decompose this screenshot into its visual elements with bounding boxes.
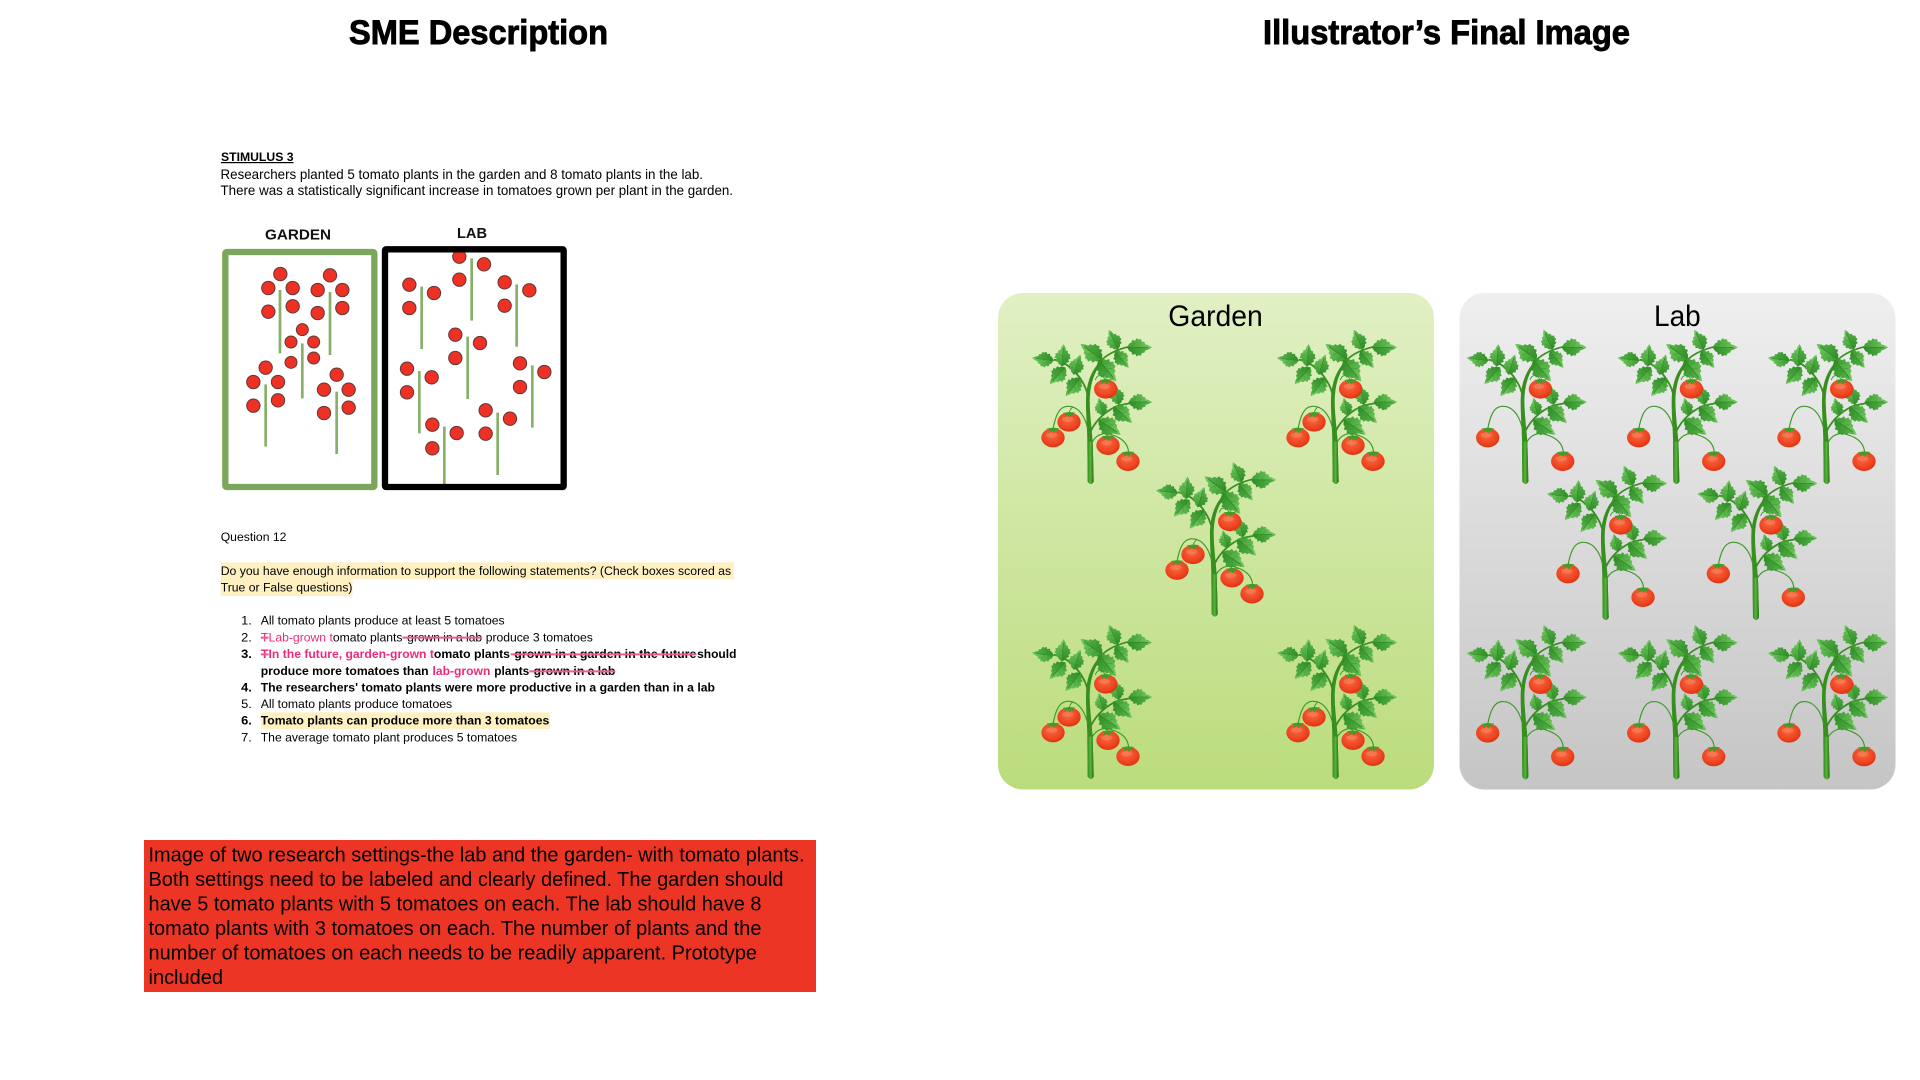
question prompt highlighted: Do you have enough information to support the following statements? (Check boxes scored as bbox=[221, 564, 731, 578]
question prompt highlighted bbox=[221, 562, 734, 596]
question prompt highlighted: True or False questions) bbox=[221, 581, 352, 595]
garden plant 5 bbox=[1276, 621, 1397, 779]
item 7: 7. bbox=[241, 731, 252, 744]
item 3 with edits: lab-grown bbox=[432, 664, 490, 678]
stimulus label: STIMULUS 3 bbox=[221, 150, 294, 164]
item 3 with edits: grown in a garden in the future bbox=[514, 647, 697, 661]
lab plant 6 bbox=[1466, 622, 1587, 779]
stimulus description line 1: Researchers planted 5 tomato plants in the garden and 8 tomato plants in the lab. bbox=[220, 167, 703, 182]
item 2 with edits: T bbox=[261, 631, 269, 644]
item 3 with edits: omato plants bbox=[434, 647, 510, 661]
item 7: The average tomato plant produces 5 tomatoes bbox=[261, 731, 517, 744]
lab plant 3 bbox=[1767, 326, 1888, 484]
sketch label: lab: LAB bbox=[457, 225, 487, 242]
lab plant 2 bbox=[1617, 326, 1738, 484]
stimulus text block bbox=[220, 150, 733, 198]
item 2 with edits: Lab-grown t bbox=[269, 631, 333, 644]
lab plant 5 bbox=[1696, 462, 1817, 620]
lab plant 4 bbox=[1546, 462, 1667, 620]
item 4: The researchers' tomato plants were more productive in a garden than in a lab bbox=[261, 681, 715, 694]
panel: lab bbox=[1460, 293, 1896, 790]
item 5: 5. bbox=[241, 697, 252, 711]
answer list bbox=[241, 614, 736, 744]
stimulus description line 2: There was a statistically significant increase in tomatoes grown per plant in the garden. bbox=[220, 183, 733, 198]
lab plant 7 bbox=[1617, 622, 1738, 779]
item 2 with edits: omato plants bbox=[333, 631, 402, 644]
item 1: All tomato plants produce at least 5 tomatoes bbox=[261, 614, 505, 628]
sketch: garden box with five plants bbox=[225, 252, 374, 487]
item 5: All tomato plants produce tomatoes bbox=[261, 697, 452, 711]
red callout: SME brief: number of tomatoes on each needs to be readily apparent. Prototype bbox=[148, 942, 757, 964]
sketch: lab box with eight plants bbox=[385, 249, 564, 488]
red callout: SME brief: included bbox=[148, 967, 223, 989]
item 1: 1. bbox=[241, 614, 252, 628]
item 3 with edits: T bbox=[261, 647, 269, 661]
sketch label: garden: GARDEN bbox=[265, 226, 331, 244]
question number: Question 12 bbox=[221, 530, 287, 544]
item 3 with edits: plants bbox=[494, 664, 529, 678]
item 2 with edits bbox=[241, 631, 593, 644]
garden plant 3 bbox=[1155, 459, 1276, 616]
item 4: 4. bbox=[241, 681, 252, 694]
red callout: SME brief bbox=[144, 840, 816, 992]
panel title: Lab: Lab bbox=[1654, 300, 1701, 333]
item 6 highlighted: 6. bbox=[241, 714, 252, 728]
panel title: Garden: Garden bbox=[1168, 300, 1263, 333]
garden plant 1 bbox=[1031, 326, 1152, 484]
question block bbox=[221, 530, 736, 744]
garden plant 4 bbox=[1031, 621, 1152, 779]
prototype sketch: garden and lab bbox=[225, 225, 564, 488]
item 3 with edits: grown in a lab bbox=[534, 664, 616, 678]
lab plant 8 bbox=[1767, 622, 1888, 779]
heading: Illustrator's Final Image: Illustrator’s Final Image bbox=[1263, 14, 1630, 52]
item 2 with edits: 2. bbox=[241, 631, 252, 644]
lab plant 1 bbox=[1466, 326, 1587, 484]
item 2 with edits: grown in a lab bbox=[407, 631, 482, 644]
item 3 with edits: should bbox=[697, 647, 736, 661]
item 2 with edits: produce 3 tomatoes bbox=[486, 631, 593, 644]
item 3 with edits: produce more tomatoes than bbox=[261, 664, 429, 678]
red callout: SME brief: Both settings need to be labeled and clearly defined. The garden should bbox=[148, 869, 784, 891]
heading: SME Description: SME Description bbox=[349, 14, 608, 52]
red callout: SME brief: Image of two research settings-the lab and the garden- with tomato plants. bbox=[148, 844, 804, 866]
item 3 with edits bbox=[241, 647, 736, 678]
garden plant 2 bbox=[1276, 326, 1397, 484]
item 3 with edits: 3. bbox=[241, 647, 252, 661]
red callout: SME brief: tomato plants with 3 tomatoes on each. The number of plants and the bbox=[148, 918, 762, 940]
item 3 with edits: In the future, garden-grown t bbox=[269, 647, 434, 661]
panel: garden bbox=[998, 293, 1434, 790]
item 6 highlighted: Tomato plants can produce more than 3 tomatoes bbox=[261, 714, 549, 728]
red callout: SME brief: have 5 tomato plants with 5 tomatoes on each. The lab should have 8 bbox=[148, 894, 762, 916]
